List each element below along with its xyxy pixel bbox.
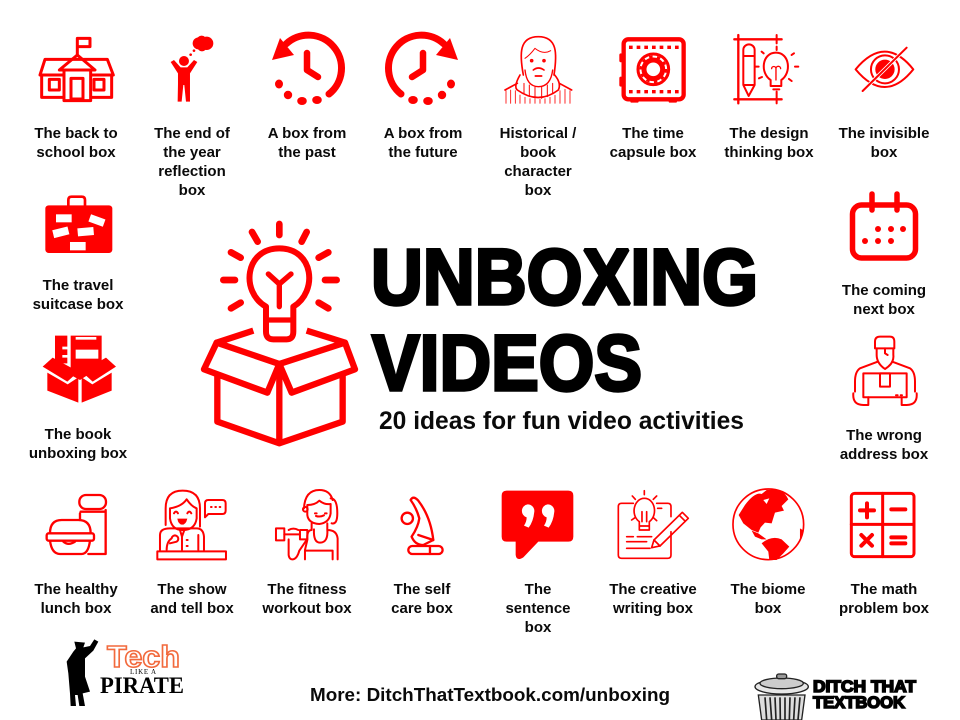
item: book unboxing box [29, 336, 128, 462]
item: invisible box [839, 48, 929, 161]
icon: clock past [272, 35, 342, 105]
label: next box [853, 301, 915, 318]
icon: lunch box and bottle [47, 495, 106, 554]
item: box from the future [384, 35, 462, 161]
label: The fitness [267, 581, 347, 598]
item: design thinking box [724, 35, 814, 161]
icon: woman with dumbbell [276, 490, 338, 559]
icon: calculator symbols [851, 493, 914, 557]
logo word line 2: TEXTBOOK [813, 694, 905, 712]
footer link text: More: DitchThatTextbook.com/unboxing [310, 685, 670, 705]
label: box [525, 619, 552, 636]
icon: pencil and bulb blueprint [734, 35, 798, 103]
label: the future [388, 144, 458, 161]
item: self care box [391, 498, 454, 617]
icon: delivery man with parcel [853, 337, 917, 405]
label: school box [36, 144, 116, 161]
logo word PIRATE: PIRATE [100, 673, 184, 698]
logo words LIKE A: LIKE A [130, 668, 156, 676]
label: the year [163, 144, 221, 161]
logo word line 1: DITCH THAT [813, 678, 916, 696]
label: care box [391, 600, 454, 617]
icon: woman talking at desk [157, 491, 226, 559]
icon: calendar [852, 194, 916, 258]
item: healthy lunch box [34, 495, 118, 617]
item: end of the year reflection box [154, 36, 231, 199]
label: The wrong [846, 427, 922, 444]
title: UNBOXING [371, 232, 758, 321]
label: box [179, 182, 206, 199]
logo word Tech: Tech [107, 639, 180, 674]
label: The show [157, 581, 227, 598]
label: reflection [158, 163, 226, 180]
icon: light bulb rising from open box [204, 224, 355, 443]
label: The invisible [839, 125, 929, 142]
item: back to school box [34, 38, 118, 161]
label: character [504, 163, 572, 180]
icon: person with thought cloud [171, 36, 213, 102]
icon: clock future [388, 35, 458, 105]
label: writing box [612, 600, 694, 617]
icon: crossed out eye [856, 48, 913, 91]
item: wrong address box [840, 337, 929, 463]
label: The healthy [34, 581, 118, 598]
label: The [525, 581, 551, 598]
label: address box [840, 446, 929, 463]
item: historical book character box [500, 37, 577, 199]
subtitle: 20 ideas for fun video activities [379, 407, 744, 435]
label: unboxing box [29, 445, 128, 462]
item: biome box [730, 489, 806, 617]
icon: quote speech bubble [502, 491, 573, 559]
label: problem box [839, 600, 930, 617]
pirate silhouette [67, 639, 98, 706]
label: The book [45, 426, 112, 443]
icon: safe [621, 39, 684, 101]
label: Historical / [500, 125, 577, 142]
label: The math [851, 581, 917, 598]
title line 2: VIDEOS [372, 318, 642, 407]
icon: suitcase [45, 197, 112, 253]
item: math problem box [839, 493, 930, 617]
label: The time [622, 125, 684, 142]
label: box [755, 600, 782, 617]
label: The design [729, 125, 809, 142]
item: creative writing box [609, 491, 697, 617]
label: suitcase box [33, 296, 124, 313]
label: lunch box [41, 600, 112, 617]
label: The end of [154, 125, 231, 142]
label: The self [394, 581, 451, 598]
item: travel suitcase box [33, 197, 124, 313]
item: show and tell box [150, 491, 234, 617]
label: The creative [609, 581, 697, 598]
label: The travel [43, 277, 113, 294]
icon: open box with books [43, 336, 116, 403]
label: A box from [268, 125, 346, 142]
icon: bearded man [505, 37, 572, 103]
label: capsule box [610, 144, 697, 161]
label: The coming [842, 282, 926, 299]
icon: yoga pose [402, 498, 443, 554]
trash can [755, 674, 808, 720]
label: and tell box [150, 600, 234, 617]
logo: Tech Like a Pirate [67, 639, 184, 706]
label: box [525, 182, 552, 199]
label: box [871, 144, 898, 161]
label: sentence [505, 600, 571, 617]
label: The biome [730, 581, 806, 598]
icon: paper with bulb and pencil [618, 491, 688, 558]
icon: globe [733, 489, 804, 560]
label: book [520, 144, 557, 161]
item: time capsule box [610, 39, 697, 161]
icon: school [40, 38, 113, 101]
label: workout box [261, 600, 352, 617]
label: the past [278, 144, 336, 161]
label: thinking box [724, 144, 814, 161]
item: box from the past [268, 35, 346, 161]
logo: Ditch That Textbook [755, 674, 916, 720]
item: sentence box [502, 491, 573, 636]
label: A box from [384, 125, 462, 142]
item: coming next box [842, 194, 926, 318]
label: The back to [34, 125, 118, 142]
item: fitness workout box [261, 490, 352, 617]
